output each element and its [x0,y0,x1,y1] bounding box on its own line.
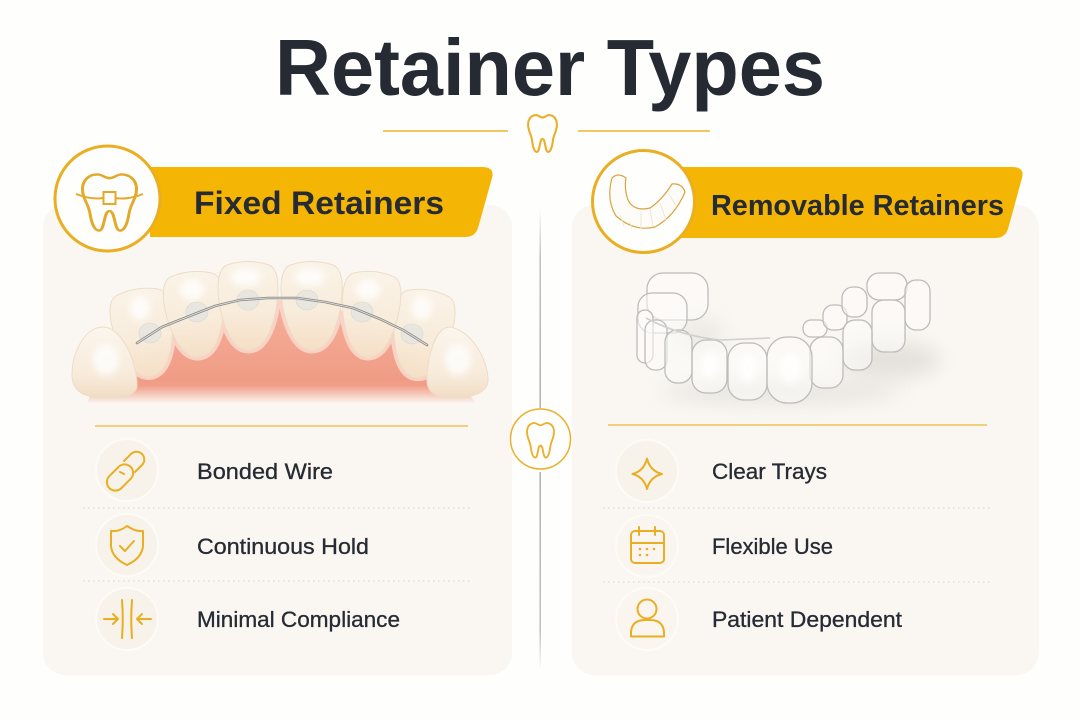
header: fixed retainers: Fixed Retainers [194,185,444,221]
icon: tooth with bracket [76,174,143,231]
icon: aligner tray [610,175,685,229]
row: patient dependent [616,588,902,650]
row: patient dependent: Patient Dependent [712,607,902,632]
header: fixed retainers [55,146,493,251]
title divider with tooth [383,115,710,152]
row: bonded wire: Bonded Wire [197,459,333,484]
divider [608,424,987,426]
row: minimal compliance [96,588,400,650]
illustration: clear aligner tray [637,273,940,403]
header: removable retainers: Removable Retainers [711,190,1004,222]
row: flexible use: Flexible Use [712,534,833,559]
divider [95,425,468,427]
row: clear trays [616,440,827,502]
panel: removable retainers [572,205,1039,675]
header: removable retainers [592,150,1023,252]
row: clear trays: Clear Trays [712,459,827,484]
panel: fixed retainers [43,205,512,675]
title: Retainer Types [275,23,825,112]
row: bonded wire [96,439,333,501]
row: minimal compliance: Minimal Compliance [197,607,400,632]
center divider [510,208,570,670]
row: continuous hold: Continuous Hold [197,534,369,559]
illustration: teeth with bonded wire [72,262,490,408]
row: continuous hold [96,514,369,576]
row: flexible use [616,515,833,577]
